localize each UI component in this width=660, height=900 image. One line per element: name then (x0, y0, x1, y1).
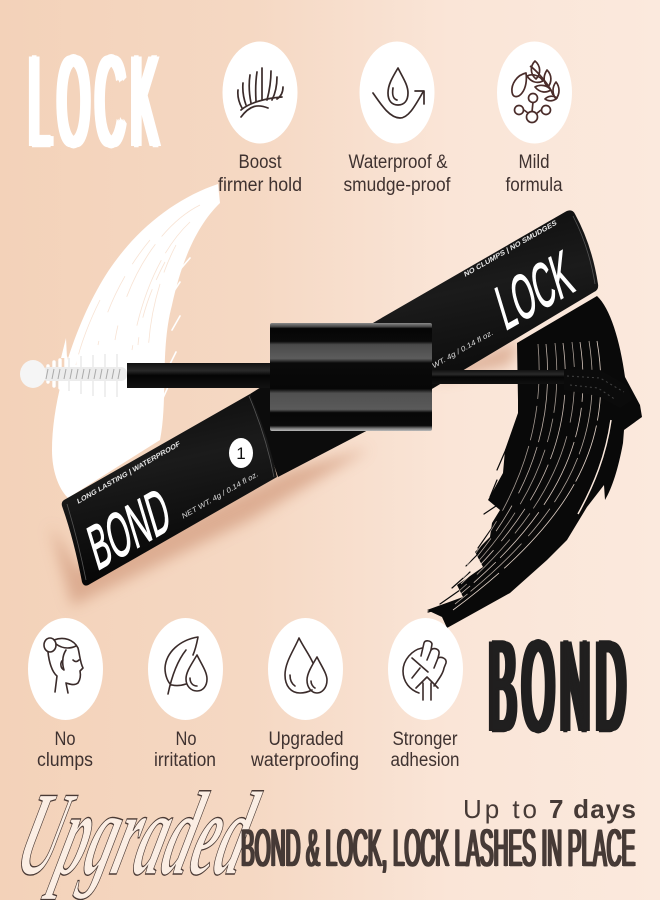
icon: eyelash (238, 68, 283, 117)
tagline: up to 7 days (463, 794, 636, 824)
number badge (229, 438, 253, 468)
tube label: BOND: BOND (81, 475, 177, 584)
number badge: 1 (236, 444, 246, 463)
tagline: up to 7 days: 7 days (549, 794, 636, 824)
label: No (54, 729, 76, 750)
icon: leaf and drop (165, 637, 207, 694)
tube label: no clumps: NO CLUMPS | NO SMUDGES (464, 219, 558, 279)
feature: upgraded waterproofing (250, 618, 359, 771)
label: Waterproof & (348, 152, 448, 173)
label: firmer hold (218, 175, 302, 196)
label (218, 152, 302, 196)
tube label: net weight: NET WT. 4g / 0.14 fl oz. (181, 469, 259, 521)
label (250, 729, 359, 771)
feature: waterproof (344, 42, 451, 196)
feature: stronger adhesion (388, 618, 463, 771)
heading: BOND: BOND (489, 613, 632, 759)
feature: mild formula (497, 42, 572, 196)
icon: herbs (512, 61, 559, 122)
label: Boost (238, 152, 282, 173)
heading: LOCK: LOCK (29, 28, 164, 174)
label (506, 152, 563, 196)
label: smudge-proof (344, 175, 451, 196)
feature: boost firmer hold (218, 42, 302, 196)
label: Stronger (392, 729, 458, 750)
label: waterproofing (250, 750, 359, 771)
black mascara swoosh (427, 296, 642, 628)
label: No (176, 729, 196, 750)
applicator cap (270, 323, 432, 431)
icon: two drops (285, 638, 327, 693)
headline: bond and lock: BOND & LOCK, LOCK LASHES IN PLACE (241, 819, 635, 878)
label: formula (506, 175, 563, 196)
tube shadows (50, 340, 520, 606)
white mascara swoosh (52, 184, 220, 498)
label (154, 729, 216, 771)
label: adhesion (390, 750, 460, 771)
label: irritation (154, 750, 216, 771)
wand left (127, 363, 272, 388)
feature: no clumps (28, 618, 103, 771)
tube label: long lasting: LONG LASTING | WATERPROOF (77, 440, 182, 506)
label: clumps (37, 750, 93, 771)
tube: BOND (62, 394, 277, 586)
black wand brush (564, 369, 632, 408)
icon: face profile (44, 638, 83, 693)
tube label: LOCK: LOCK (489, 238, 580, 344)
label (390, 729, 460, 771)
label (37, 729, 93, 771)
label: Mild (518, 152, 550, 173)
white wand brush (20, 354, 127, 397)
wand right (430, 370, 567, 384)
icon: fist and arrow (403, 641, 446, 700)
tube label: net weight: NET WT. 4g / 0.14 fl oz. (415, 328, 494, 380)
icon: drop and arrow (373, 68, 424, 118)
label (344, 152, 451, 196)
script title: Upgraded: Upgraded (4, 767, 271, 900)
tagline: up to 7 days: Up to (463, 794, 537, 824)
label: Upgraded (268, 729, 344, 750)
tube neck (250, 372, 372, 477)
feature: no irritation (148, 618, 223, 771)
tube: LOCK (340, 210, 598, 432)
